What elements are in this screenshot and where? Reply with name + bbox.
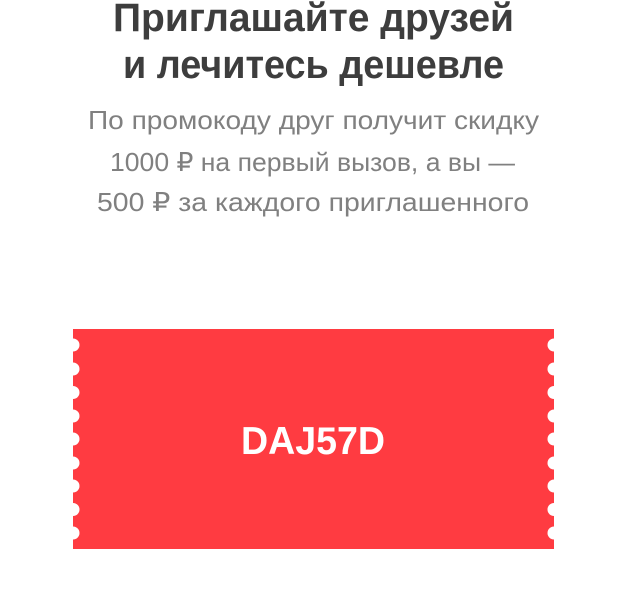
left edge notches	[66, 338, 80, 540]
title	[113, 0, 514, 87]
promo code: DAJ57D	[241, 420, 385, 463]
description text: 500 ₽ за каждого приглашенного	[97, 187, 529, 217]
description text: 1000 ₽ на первый вызов, а вы —	[110, 147, 515, 177]
description text	[88, 105, 539, 217]
promo ticket	[66, 329, 560, 549]
title: и лечитесь дешевле	[123, 43, 504, 87]
ticket body	[73, 329, 554, 549]
right edge notches	[548, 338, 560, 540]
description text: По промокоду друг получит скидку	[88, 105, 539, 135]
